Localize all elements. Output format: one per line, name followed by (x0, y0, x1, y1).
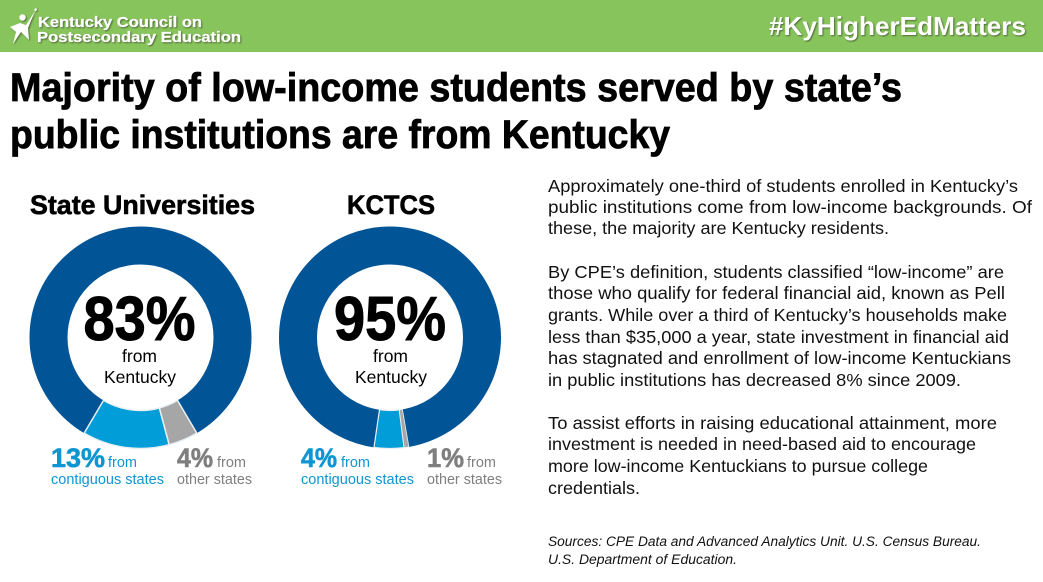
text block: call to action: investment is needed in need-based aid to encourage (548, 434, 976, 454)
text block: intro paragraph (548, 176, 1032, 238)
logo text: Postsecondary Education (37, 29, 241, 46)
text block: call to action: To assist efforts in raising educational attainment, more (548, 413, 997, 433)
center value: 83% from Kentucky: Kentucky (104, 367, 176, 387)
label: 4% from contiguous states: 4% (301, 443, 337, 473)
text block: call to action (548, 413, 997, 498)
label: 13% from contiguous states: 13% (51, 443, 105, 473)
label: 1% from other states: other states (427, 472, 502, 488)
center value: 95% from Kentucky: 95% (334, 285, 446, 354)
center value: 83% from Kentucky: from (122, 346, 157, 366)
label: 4% from contiguous states: contiguous states (301, 472, 414, 488)
panel: State Universities (30, 190, 255, 488)
text block: low-income definition: has stagnated and enrollment of low-income Kentuckians (548, 348, 1011, 368)
label: 4% from other states: from (217, 455, 246, 471)
label: 1% from other states: from (467, 455, 496, 471)
heading: State Universities: State Universities (30, 190, 255, 220)
text block: intro paragraph: public institutions come from low-income backgrounds. Of (548, 197, 1032, 217)
label: 13% from contiguous states: from (108, 455, 137, 471)
center value: 95% from Kentucky (334, 285, 446, 387)
center value: 83% from Kentucky: 83% (84, 285, 196, 354)
title: public institutions are from Kentucky (10, 113, 671, 157)
heading: KCTCS: KCTCS (347, 190, 435, 220)
label: 1% from other states: 1% (427, 443, 464, 473)
label: 4% from contiguous states (301, 443, 414, 488)
text block: low-income definition (548, 262, 1011, 390)
text block: low-income definition: By CPE’s definition, students classified “low-income” are (548, 262, 1004, 282)
donut chart: State Universities (48, 246, 232, 448)
text block: intro paragraph: Approximately one-third of students enrolled in Kentucky’s (548, 176, 1018, 196)
donut chart: KCTCS (298, 246, 482, 448)
icon: star figure logo (10, 8, 37, 44)
sources: Sources: CPE Data and Advanced Analytics Unit. U.S. Census Bureau. (548, 534, 981, 549)
label: 4% from other states (177, 443, 252, 488)
title (10, 66, 902, 157)
text block: low-income definition: less than $35,000 a year, state investment in financial aid (548, 327, 1009, 347)
text block: low-income definition: grants. While over a third of Kentucky’s households make (548, 305, 1007, 325)
label: 4% from contiguous states: from (341, 455, 370, 471)
text block: low-income definition: those who qualify for federal financial aid, known as Pell (548, 283, 1005, 303)
logo text: Kentucky Council on (38, 14, 202, 31)
label: 13% from contiguous states (51, 443, 164, 488)
title: Majority of low-income students served by state’s (10, 66, 902, 110)
text block: low-income definition: in public institutions has decreased 8% since 2009. (548, 370, 961, 390)
hashtag: #KyHigherEdMatters (769, 11, 1026, 41)
label: 4% from other states: other states (177, 472, 252, 488)
label: 13% from contiguous states: contiguous states (51, 472, 164, 488)
text block: call to action: credentials. (548, 478, 640, 498)
center value: 83% from Kentucky (84, 285, 196, 387)
logo text (37, 14, 241, 46)
label: 4% from other states: 4% (177, 443, 213, 473)
text block: intro paragraph: these, the majority are Kentucky residents. (548, 218, 889, 238)
panel: KCTCS (298, 190, 502, 488)
header banner (0, 0, 1043, 52)
sources (548, 534, 981, 567)
center value: 95% from Kentucky: Kentucky (355, 367, 427, 387)
center value: 95% from Kentucky: from (373, 346, 408, 366)
text block: call to action: more low-income Kentuckians to pursue college (548, 456, 928, 476)
label: 1% from other states (427, 443, 502, 488)
sources: U.S. Department of Education. (548, 552, 737, 567)
